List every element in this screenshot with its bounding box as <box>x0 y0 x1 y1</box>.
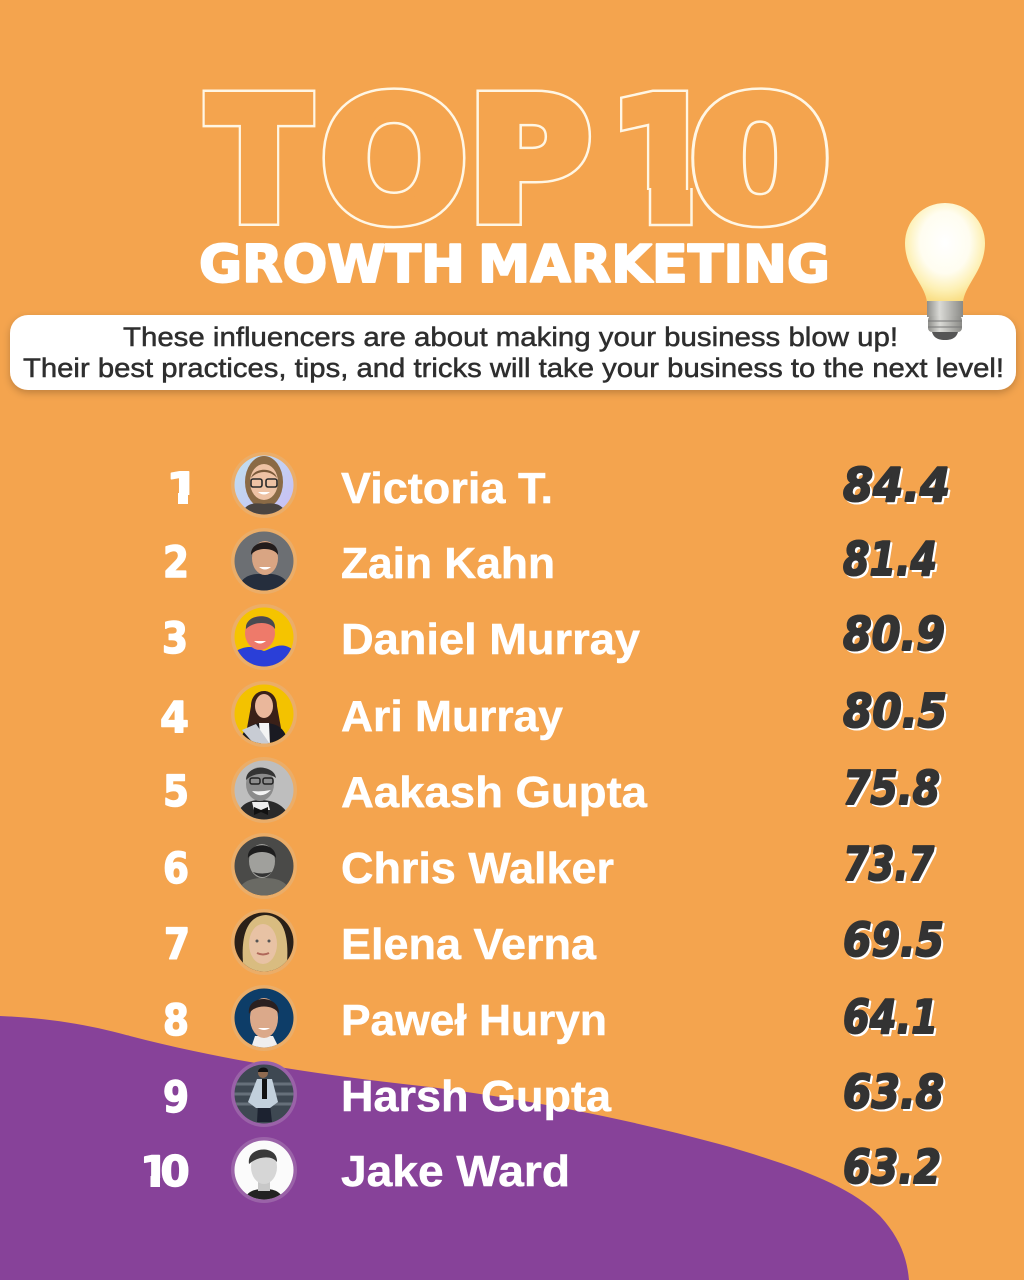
row 5: 75.8 <box>843 761 940 815</box>
row 9: 63.8 <box>843 1065 944 1119</box>
row 7: 69.5 <box>843 913 944 967</box>
title: TOP 10: T <box>208 63 310 259</box>
row 6: 73.7 <box>843 837 934 891</box>
row 8: 64.1 <box>843 990 938 1044</box>
row 2: Zain Kahn <box>341 539 555 588</box>
avatar: Jake Ward <box>231 1137 297 1203</box>
row 6: 6 <box>163 844 189 894</box>
avatar: Victoria T. <box>231 452 297 518</box>
row 2: 81.4 <box>843 532 937 586</box>
row 9: 9 <box>163 1073 189 1123</box>
row 5: 75.8 <box>845 763 942 817</box>
title: TOP 10: O <box>321 63 467 259</box>
description box: These influencers are about making your business blow up! <box>123 322 898 352</box>
row 4: 80.5 <box>843 684 947 738</box>
description box <box>10 315 1016 390</box>
avatar: Aakash Gupta <box>231 757 297 823</box>
icon: light bulb <box>905 203 985 340</box>
row 8 <box>163 985 940 1051</box>
avatar: Elena Verna <box>231 909 297 975</box>
avatar: Chris Walker <box>231 833 297 899</box>
title: TOP 10: 0 <box>690 63 830 259</box>
row 2: 2 <box>163 538 189 588</box>
title: TOP 10: P <box>468 63 591 259</box>
row 10: 63.2 <box>843 1140 941 1194</box>
row 3 <box>162 604 947 670</box>
row 8: Paweł Huryn <box>341 996 607 1045</box>
avatar: Daniel Murray <box>231 604 297 670</box>
row 1: 1 <box>166 464 200 514</box>
avatar: Ari Murray <box>231 681 297 747</box>
row 7: 69.5 <box>845 915 946 969</box>
description box: Their best practices, tips, and tricks will take your business to the next level! <box>23 353 1004 383</box>
row 7: 7 <box>164 920 190 970</box>
row 8: 8 <box>163 996 189 1046</box>
row 10: Jake Ward <box>341 1147 570 1196</box>
title: TOP 10: 0 <box>690 63 830 259</box>
subtitle: GROWTH MARKETING: MARKETING <box>478 235 830 295</box>
row 1: Victoria T. <box>341 464 553 513</box>
row 9 <box>163 1061 946 1127</box>
row 1: 84.4 <box>845 460 952 514</box>
purple wave shape <box>0 1016 909 1280</box>
row 9: 63.8 <box>845 1067 946 1121</box>
row 3: Daniel Murray <box>341 615 641 664</box>
row 6: Chris Walker <box>341 844 614 893</box>
row 10: 63.2 <box>845 1142 943 1196</box>
title: TOP 10: 1 <box>609 63 719 259</box>
row 10: 1 <box>140 1147 169 1196</box>
row 2: 81.4 <box>845 534 939 588</box>
row 6: 73.7 <box>845 839 936 893</box>
row 2 <box>163 528 939 594</box>
row 7 <box>164 909 946 975</box>
row 5: Aakash Gupta <box>341 768 648 817</box>
row 6 <box>163 833 936 899</box>
title: TOP 10: 1 <box>609 63 719 259</box>
row 5: 5 <box>163 767 189 817</box>
subtitle: GROWTH MARKETING <box>199 235 830 295</box>
subtitle: GROWTH MARKETING: GROWTH <box>199 235 465 295</box>
row 8: 64.1 <box>845 992 940 1046</box>
row 3: 3 <box>162 614 188 664</box>
row 1: 84.4 <box>843 458 950 512</box>
row 3: 80.9 <box>845 609 947 663</box>
row 10: 0 <box>160 1147 190 1196</box>
row 4: Ari Murray <box>341 692 564 741</box>
row 10 <box>140 1137 943 1203</box>
title: TOP 10: O <box>321 63 467 259</box>
avatar: Zain Kahn <box>231 528 297 594</box>
row 4: 4 <box>160 693 189 743</box>
row 4 <box>160 681 949 747</box>
row 7: Elena Verna <box>341 920 597 969</box>
row 4: 80.5 <box>845 686 949 740</box>
row 1 <box>166 452 952 518</box>
avatar: Harsh Gupta <box>231 1061 297 1127</box>
row 3: 80.9 <box>843 607 945 661</box>
title: TOP 10 <box>202 87 829 228</box>
row 9: Harsh Gupta <box>341 1072 612 1121</box>
title: TOP 10: T <box>208 63 310 259</box>
row 5 <box>163 757 942 823</box>
avatar: Paweł Huryn <box>231 985 297 1051</box>
title: TOP 10: P <box>468 63 591 259</box>
